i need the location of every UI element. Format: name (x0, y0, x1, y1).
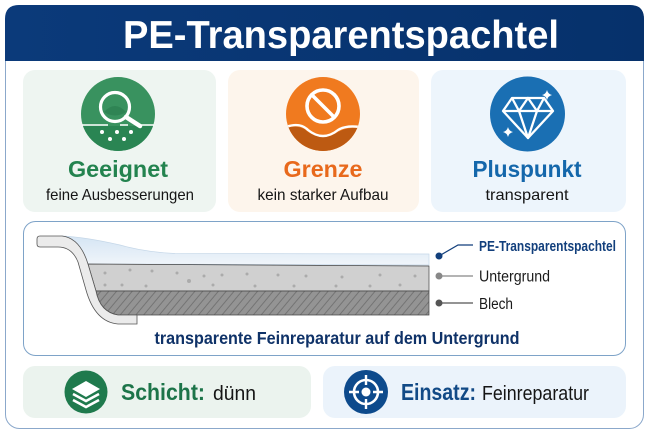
label: Untergrund: Untergrund (479, 268, 550, 286)
label: Schicht: (121, 379, 205, 405)
icon: magnifier over fine surface (81, 77, 155, 152)
panel: Grenze (228, 70, 419, 212)
label: Blech (436, 296, 513, 313)
text: kein starker Aufbau (258, 187, 388, 204)
icon: target (344, 370, 388, 414)
value: dünn (213, 382, 256, 405)
heading: Pluspunkt (472, 156, 582, 182)
value: Feinreparatur (482, 382, 589, 405)
panel: Geeignet (23, 70, 216, 212)
label: Blech: Blech (479, 296, 513, 313)
panel: cross-section diagram (24, 222, 626, 356)
layer: Blech (96, 291, 429, 315)
title: PE-Transparentspachtel (123, 14, 559, 57)
panel: Schicht (23, 366, 311, 418)
label: PE-Transparentspachtel: PE-Transparentspachtel (479, 239, 616, 255)
panel: Einsatz (323, 366, 626, 418)
icon: diamond (490, 76, 565, 152)
icon: layers (64, 370, 108, 414)
layer: Untergrund (88, 264, 429, 291)
panel: Pluspunkt (431, 70, 626, 212)
icon: prohibited thick build-up (286, 77, 360, 152)
label: Einsatz: (401, 379, 476, 405)
sheet metal edge (37, 236, 137, 324)
heading: Geeignet (68, 156, 168, 182)
label: PE-Transparentspachtel (436, 239, 616, 260)
text: feine Ausbesserungen (46, 187, 194, 204)
layer: PE-Transparentspachtel (62, 236, 429, 265)
label: Untergrund (436, 268, 550, 286)
caption: transparente Feinreparatur auf dem Untergrund (154, 328, 520, 348)
heading: Grenze (284, 156, 362, 182)
text: transparent (486, 187, 569, 204)
title banner (5, 5, 644, 61)
